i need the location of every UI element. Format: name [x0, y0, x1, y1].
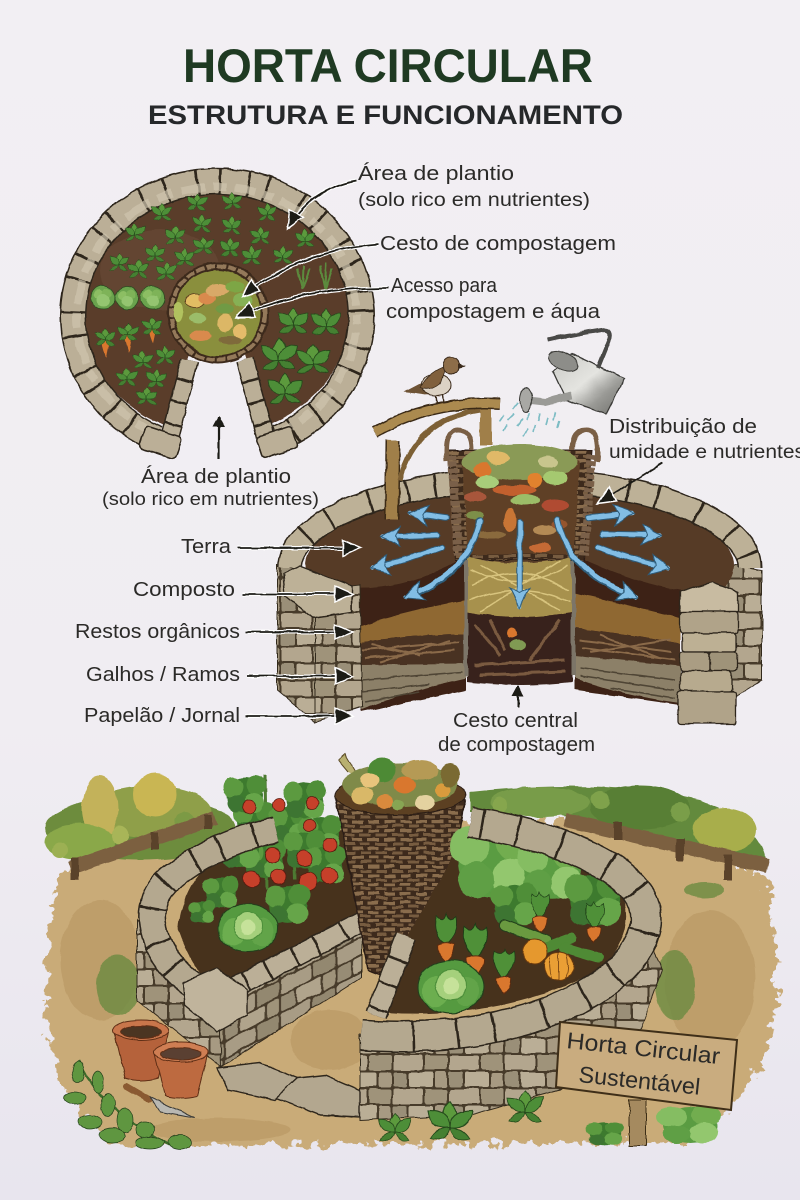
icon: watering can — [520, 330, 624, 414]
stone ring — [73, 181, 361, 439]
arrow: moisture distribution — [598, 463, 663, 503]
left bed wall — [137, 920, 221, 1067]
cardboard lines — [362, 668, 675, 702]
stepping stones — [217, 1063, 360, 1117]
label: access: Acesso para — [391, 275, 498, 297]
label: planting area lower: Área de plantio — [141, 465, 291, 488]
back rim stones — [290, 480, 750, 568]
branches in basket — [467, 612, 572, 685]
back hedge left — [45, 773, 235, 860]
carrots right bed — [435, 892, 604, 993]
straw layer in basket — [467, 556, 572, 617]
wooden sign — [556, 1022, 737, 1110]
soil texture — [100, 230, 220, 310]
carrots — [95, 317, 162, 358]
tomato plants — [218, 775, 346, 890]
sign post — [629, 1100, 646, 1146]
soil top surface — [306, 491, 734, 639]
label arrow: compost basket — [243, 244, 378, 296]
layer: cardboard and newspaper — [358, 656, 680, 710]
label arrow: access — [237, 288, 388, 317]
left wall front block — [315, 585, 362, 722]
fence left — [70, 815, 215, 880]
label: central basket: Cesto central — [453, 710, 578, 732]
basket side ropes — [452, 455, 592, 555]
grass seedlings — [298, 263, 332, 290]
lettuce left bed — [218, 904, 278, 952]
label: compost: Composto — [133, 579, 235, 601]
corner plant — [64, 1060, 192, 1149]
label arrow line: planting area — [288, 181, 356, 228]
panel: cross-section — [238, 330, 762, 724]
wedge end stones — [139, 426, 298, 459]
panel: illustrated garden scene — [45, 754, 777, 1149]
layer arrows — [238, 548, 360, 716]
ground shading — [60, 900, 755, 1142]
left bed corner stone — [183, 968, 247, 1032]
basket compost mound — [334, 754, 466, 815]
section labels — [75, 416, 800, 756]
seedling plants — [109, 192, 315, 404]
sign shrubs — [585, 1105, 722, 1145]
label: branches: Galhos / Ramos — [86, 664, 240, 686]
basket handles — [446, 430, 598, 462]
right bed curved rim — [362, 822, 646, 1036]
icon: bird — [404, 358, 466, 404]
large leafy plants — [261, 307, 341, 403]
grass tufts at bed foot — [379, 1090, 543, 1141]
right bed curved wall — [360, 945, 662, 1120]
compost basket upper body — [448, 450, 592, 560]
water drops — [500, 403, 560, 436]
lettuce right bed — [418, 961, 484, 1013]
sign text bottom: Sustentável — [577, 1061, 702, 1100]
tall wicker basket — [336, 800, 465, 978]
soil bed — [82, 187, 350, 435]
cucumbers — [505, 925, 598, 958]
wedge side stones — [167, 360, 268, 447]
outer wall rear right — [680, 565, 762, 700]
label: of composting: de compostagem — [438, 734, 595, 756]
arrow: wedge entrance — [218, 417, 220, 459]
left bed curved rim — [152, 830, 275, 990]
subtitle: ESTRUTURA E FUNCIONAMENTO — [148, 100, 623, 130]
plan labels — [102, 162, 616, 509]
right wall block — [678, 582, 738, 724]
label arrow: planting area — [288, 181, 356, 228]
label: moisture and nutrients: umidade e nutrientes — [609, 442, 800, 463]
label: nutrient-rich soil lower: (solo rico em nutrientes) — [102, 489, 319, 509]
label: planting area: Área de plantio — [358, 162, 514, 185]
label: cardboard: Papelão / Jornal — [84, 705, 240, 727]
right bed straight rim — [376, 936, 406, 1015]
outer wall rear — [277, 565, 362, 722]
arbor front post and arch — [375, 404, 500, 520]
green ground tufts — [96, 882, 725, 1020]
access wedge opening — [150, 352, 282, 470]
left bed soil — [178, 830, 362, 995]
pumpkins — [523, 940, 574, 980]
ground — [46, 820, 777, 1146]
arbor rear post — [480, 405, 492, 445]
compost basket top view — [171, 266, 265, 360]
fence right — [565, 820, 768, 880]
label: earth: Terra — [181, 536, 232, 558]
low greens left bed — [189, 876, 310, 924]
layer: compost — [356, 593, 680, 644]
trowel — [126, 1086, 195, 1118]
right bed soil — [378, 825, 627, 1014]
arrow: central basket — [517, 686, 519, 708]
label arrow line: access — [237, 288, 388, 317]
back hedge right — [470, 786, 766, 860]
cut faces background cover — [355, 555, 466, 712]
label arrow line: compost basket — [243, 244, 378, 296]
sign text top: Horta Circular — [565, 1027, 722, 1069]
blue moisture arrows — [372, 513, 668, 606]
terracotta pots — [113, 1020, 208, 1098]
left bed straight rim — [220, 922, 362, 995]
left bed straight wall — [219, 922, 362, 1067]
compost scraps in basket — [462, 444, 580, 554]
label: moisture distribution: Distribuição de — [609, 416, 757, 438]
large leafy greens — [450, 822, 624, 925]
title: HORTA CIRCULAR — [183, 39, 593, 92]
label: nutrient-rich soil: (solo rico em nutrientes) — [358, 190, 590, 211]
label: organic scraps: Restos orgânicos — [75, 621, 240, 643]
basket rods — [466, 560, 573, 676]
label: compost basket: Cesto de compostagem — [380, 233, 616, 255]
twig strokes — [362, 635, 675, 662]
label: compost and water: compostagem e áqua — [386, 301, 601, 323]
layer: organic scraps and branches — [356, 628, 680, 666]
left wall top stones — [283, 566, 352, 618]
panel: plan view of the circular garden — [73, 181, 388, 470]
cabbages — [91, 285, 165, 310]
cut face right — [574, 555, 680, 705]
